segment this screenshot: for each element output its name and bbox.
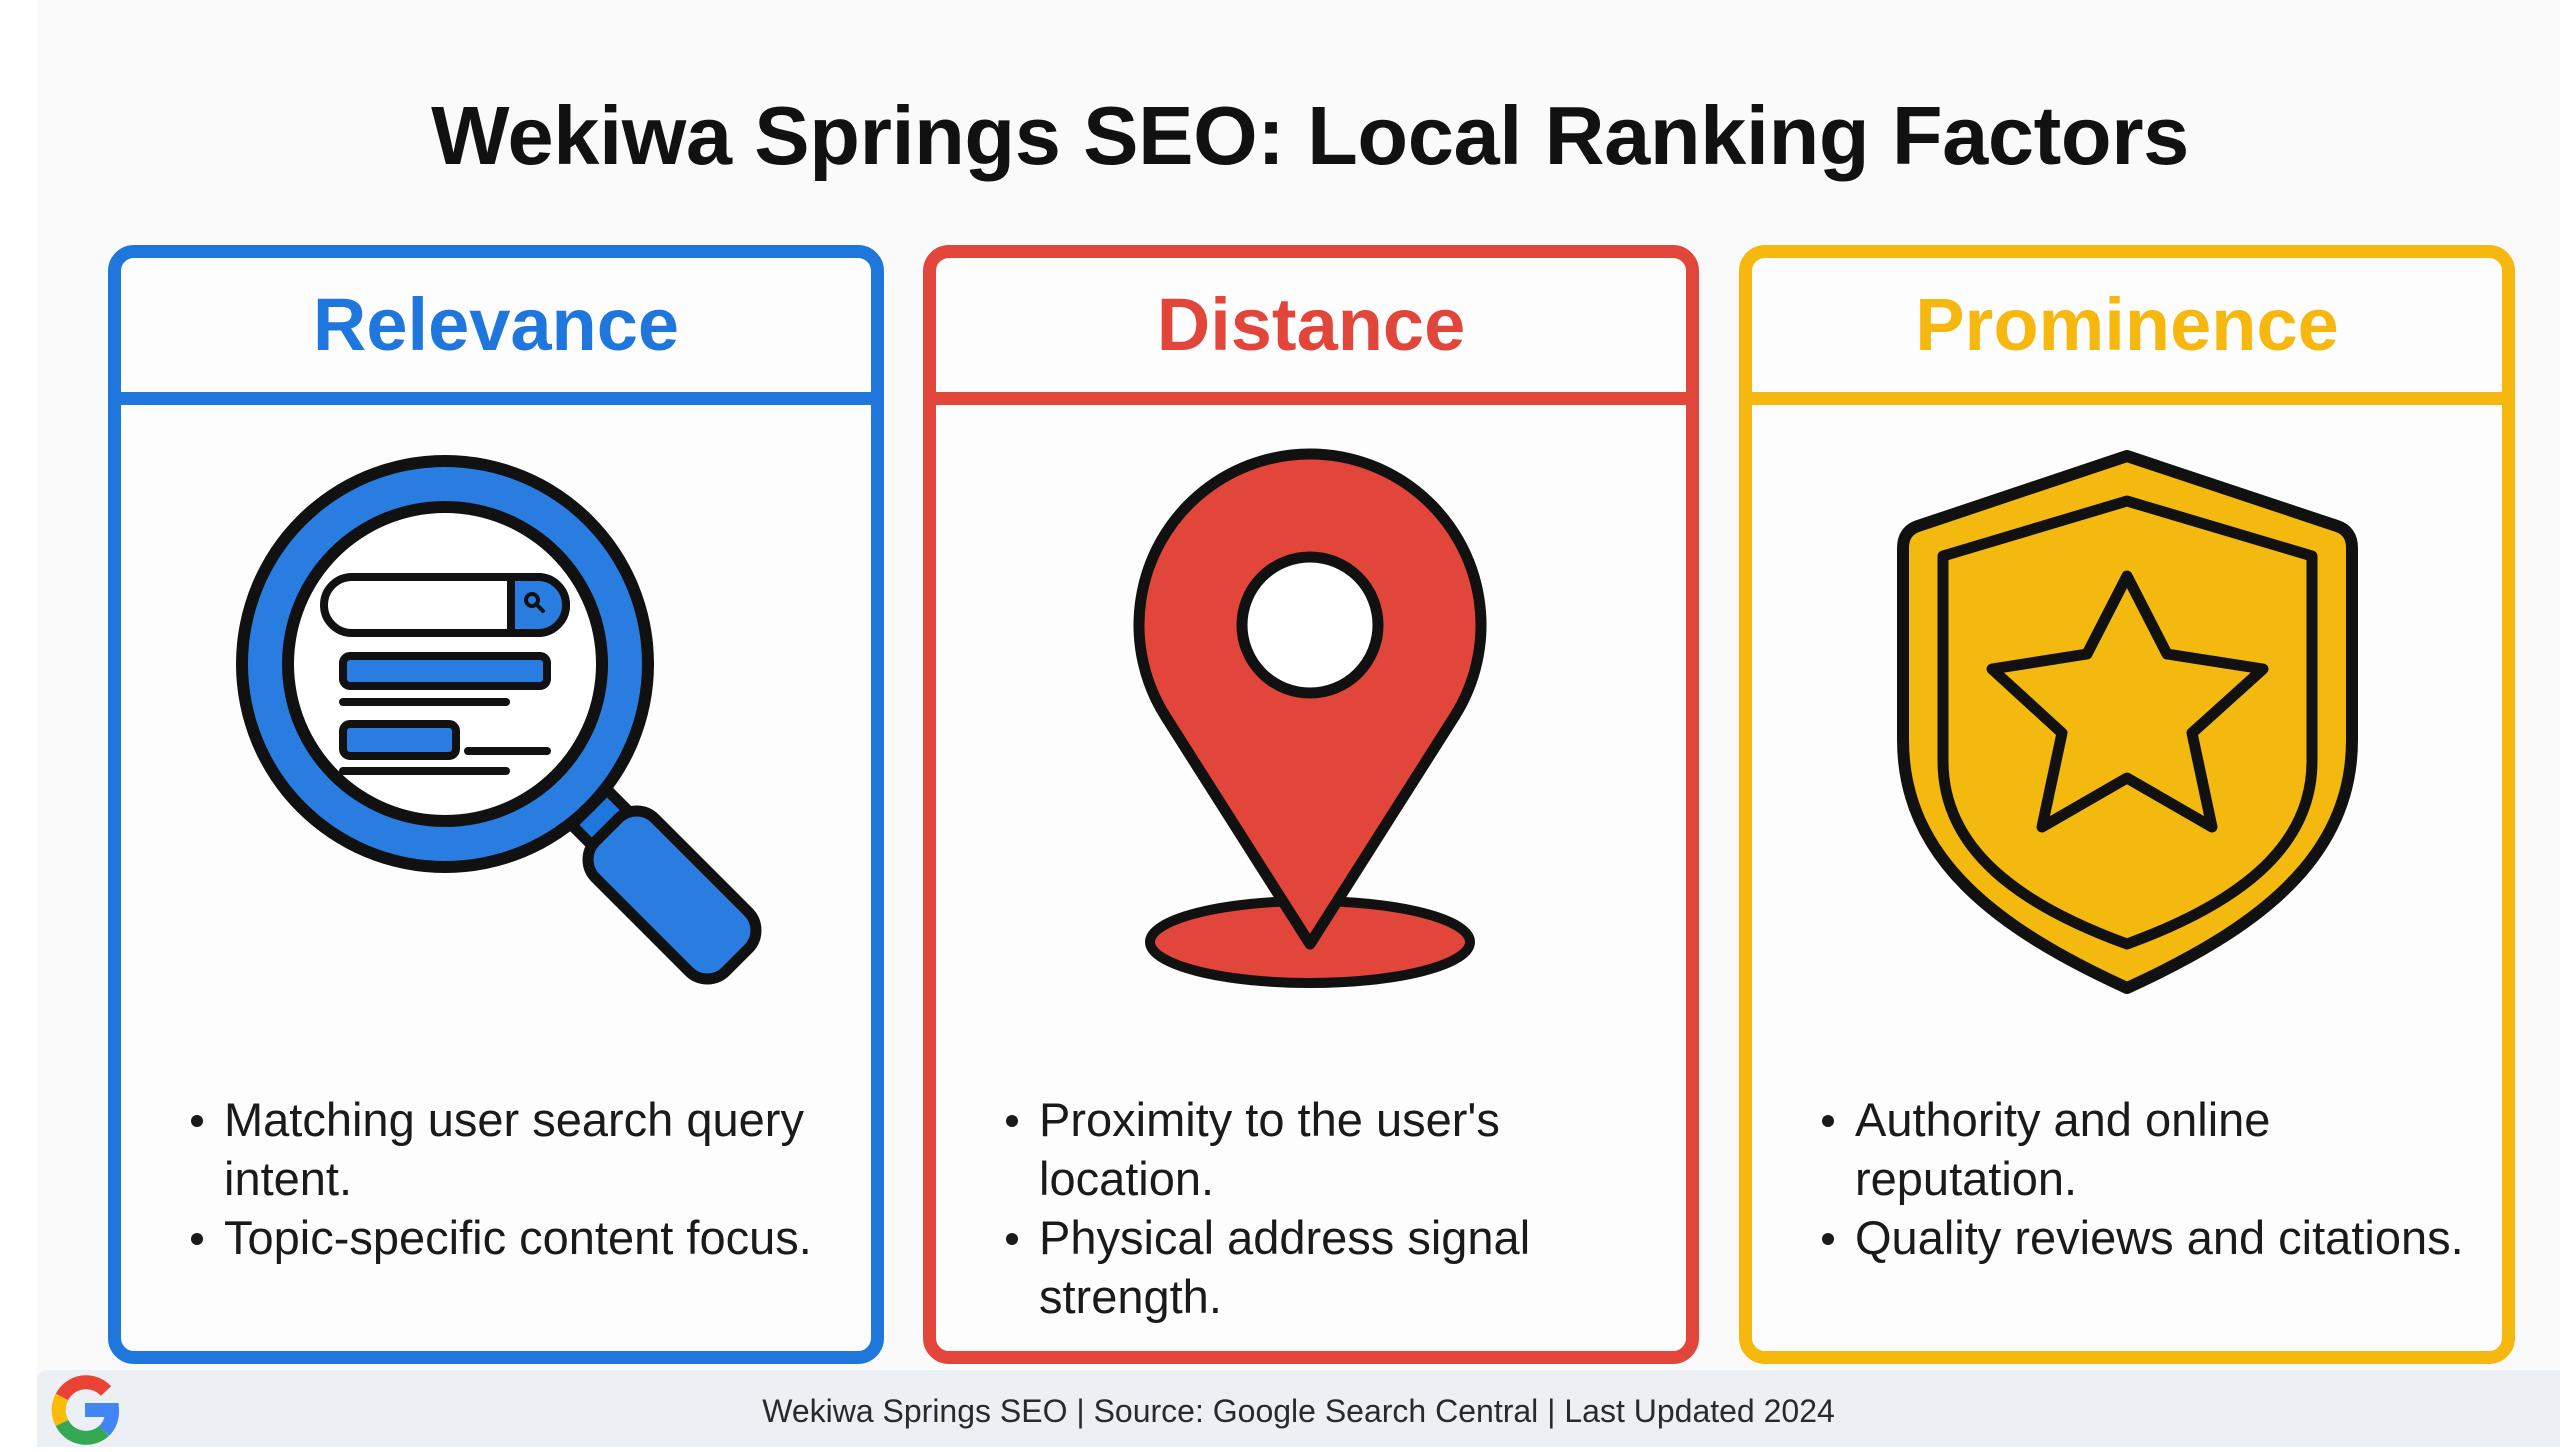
bullets: distance: Physical address signal [1039, 1211, 1530, 1264]
bullets: prominence: Quality reviews and citations. [1855, 1211, 2464, 1264]
heading: prominence [1752, 258, 2502, 405]
footer [37, 1370, 2560, 1447]
icon: google G [52, 1375, 119, 1445]
panel: relevance [108, 245, 884, 1364]
bullets: prominence [1822, 1093, 2464, 1264]
footer text: Wekiwa Springs SEO | Source: Google Search Central | Last Updated 2024 [762, 1393, 1835, 1429]
title: Wekiwa Springs SEO: Local Ranking Factors [431, 89, 2189, 182]
bullets: distance: Proximity to the user's [1039, 1093, 1500, 1146]
icon: magnifying glass [236, 455, 762, 984]
heading: relevance: Relevance [313, 283, 679, 366]
bullets: distance: location. [1039, 1152, 1214, 1205]
bullets: relevance: Matching user search query [224, 1093, 804, 1146]
bullets: relevance: Topic-specific content focus. [224, 1211, 812, 1264]
bullets: relevance: intent. [224, 1152, 352, 1205]
bullets: distance [1006, 1093, 1530, 1323]
icon: map pin [1133, 448, 1486, 988]
panel: distance [923, 245, 1699, 1364]
bullets: relevance [191, 1093, 812, 1264]
bullets: distance: strength. [1039, 1270, 1222, 1323]
heading: distance [936, 258, 1686, 405]
heading: prominence: Prominence [1915, 283, 2339, 366]
heading: distance: Distance [1157, 283, 1465, 366]
heading: relevance [121, 258, 871, 405]
icon: shield with star [1897, 450, 2358, 994]
bullets: prominence: reputation. [1855, 1152, 2077, 1205]
panel: prominence [1739, 245, 2515, 1364]
bullets: prominence: Authority and online [1855, 1093, 2270, 1146]
